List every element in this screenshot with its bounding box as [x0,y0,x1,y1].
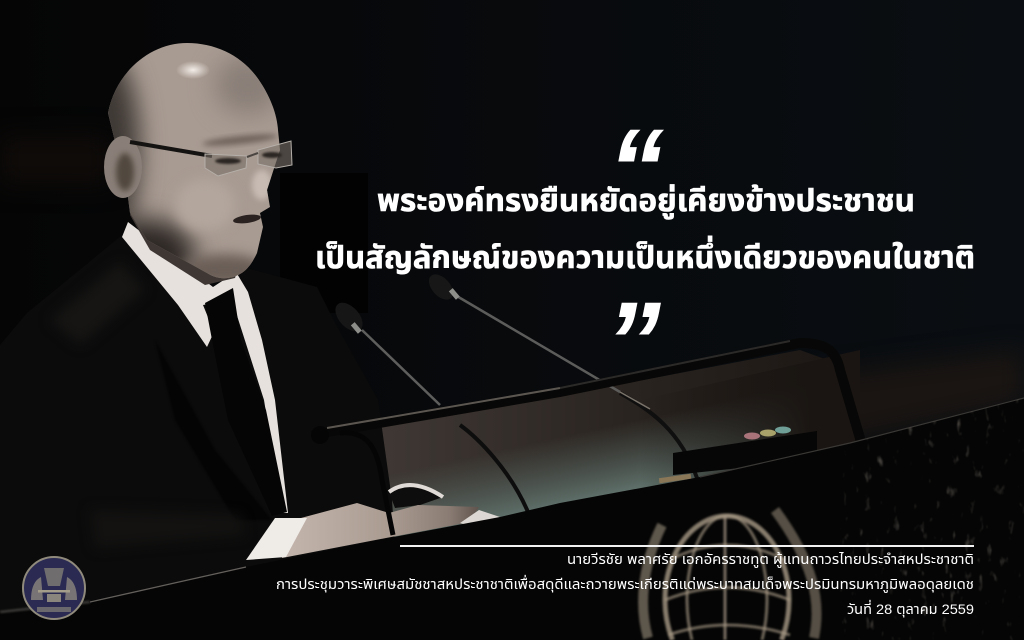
closing quotation mark: ” [605,279,661,404]
highlight on the head [176,61,210,79]
desk speckled texture [840,398,1024,640]
quote text: พระองค์ทรงยืนหยัดอยู่เคียงข้างประชาชน [377,183,915,219]
speaker: hands and shirt cuffs [246,485,500,560]
microphone: front stem and head [330,298,440,405]
speaker: suit [0,235,395,612]
divider line above the caption [400,545,974,547]
opening quotation mark: “ [608,106,664,231]
stage backdrop behind the rail [327,350,1024,540]
box and coloured items on the lectern [659,426,817,483]
quote text: เป็นสัญลักษณ์ของความเป็นหนึ่งเดียวของคนในชาติ [315,235,975,275]
UN emblem on the desk [643,510,817,640]
glasses [130,141,292,176]
microphone: rear stem and head [424,270,620,392]
speaker: shirt and collar [122,222,288,513]
speaker: black tie [205,288,287,516]
logo: ministry seal [23,557,85,619]
mouth [233,213,261,225]
caption text: วันที่ 28 ตุลาคม 2559 [847,599,974,618]
ear [104,136,142,198]
caption text [276,551,974,618]
speaker: head [104,43,292,285]
quote text [315,183,975,275]
caption text: นายวีรชัย พลาศรัย เอกอัครราชทูต ผู้แทนถาวรไทยประจำสหประชาชาติ [567,551,974,568]
lectern desk [0,398,1024,640]
caption text: การประชุมวาระพิเศษสมัชชาสหประชาชาติเพื่อสดุดีและถวายพระเกียรติแด่พระบาทสมเด็จพระปรมินทรมหาภูมิพลอดุลยเดช [276,574,974,593]
lectern rail and gooseneck lamps [311,341,862,535]
